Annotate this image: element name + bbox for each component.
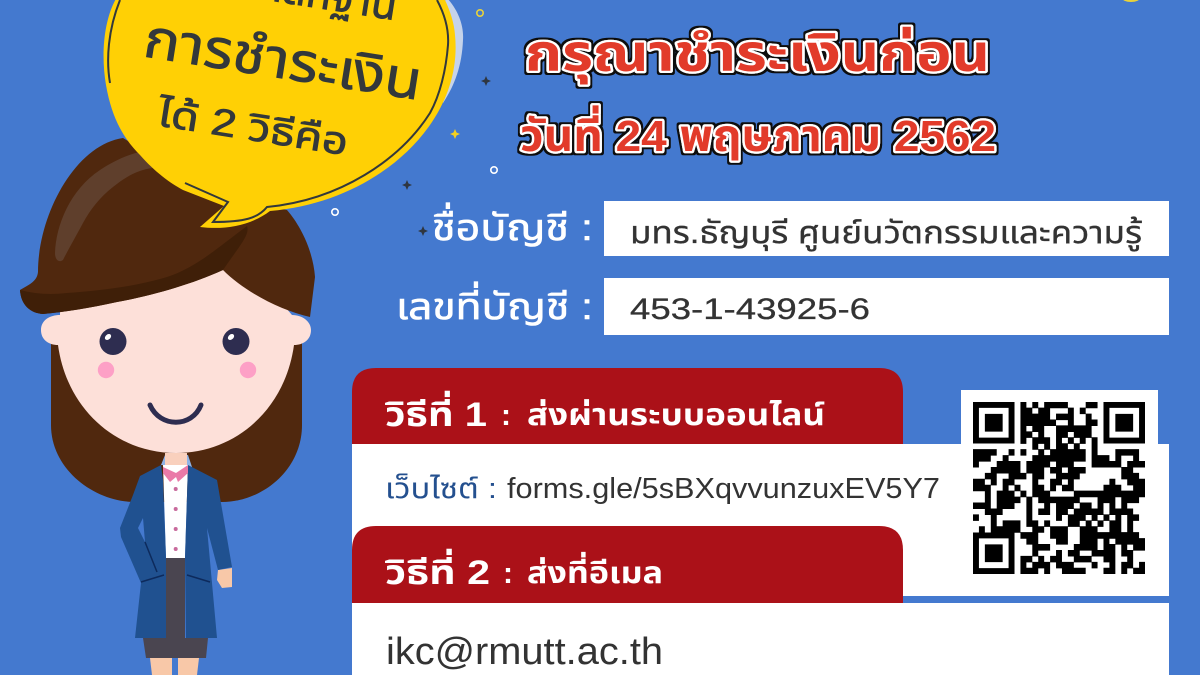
panel: method 1 <box>352 368 1169 596</box>
field: account number <box>604 278 1169 335</box>
panel: method 1: วิธีที่ 1 <box>384 390 487 434</box>
speech bubble <box>104 0 463 228</box>
panel: method 1: เว็บไซต์ : <box>385 473 497 505</box>
blazer <box>120 465 232 638</box>
eyes <box>100 328 250 355</box>
field: account name: มทร.ธัญบุรี ศูนย์นวัตกรรมและความรู้ <box>630 215 1143 251</box>
character: woman in blue blazer <box>20 138 315 675</box>
panel: method 1: ส่งผ่านระบบออนไลน์ <box>527 399 825 432</box>
panel: method 2 <box>352 526 1169 675</box>
pockets <box>141 542 210 582</box>
heading: please pay before: กรุณาชำระเงินก่อน <box>525 25 990 84</box>
bubble text <box>130 0 436 174</box>
panel: method 2: วิธีที่ 2 <box>384 548 490 592</box>
QR code <box>961 390 1158 596</box>
field: account number: 453-1-43925-6 <box>630 293 870 326</box>
panel: method 1: forms.gle/5sBXqvvunzuxEV5Y7 <box>507 473 940 505</box>
skirt <box>143 558 208 658</box>
field: account name <box>604 201 1169 256</box>
heading: date: วันที่ 24 พฤษภาคม 2562 <box>520 105 996 161</box>
shirt buttons <box>174 487 178 551</box>
bubble text: ได้ 2 วิธีคือ <box>154 92 351 164</box>
shirt <box>163 465 188 558</box>
label: account number: เลขที่บัญชี : <box>396 281 593 327</box>
bubble text: การชำระเงิน <box>140 9 426 112</box>
panel: method 2: : <box>503 557 513 590</box>
mouth <box>150 405 201 422</box>
panel: method 2: ikc@rmutt.ac.th <box>386 631 663 673</box>
label: account name: ชื่อบัญชี : <box>432 202 593 248</box>
panel: method 1: : <box>501 399 511 432</box>
cheeks <box>98 362 256 378</box>
legs <box>150 658 199 675</box>
neck and collar <box>161 453 192 472</box>
panel: method 2: ส่งที่อีเมล <box>527 551 663 590</box>
bow collar <box>163 465 188 482</box>
decorative sparkles <box>332 0 1140 236</box>
hand <box>217 568 232 588</box>
